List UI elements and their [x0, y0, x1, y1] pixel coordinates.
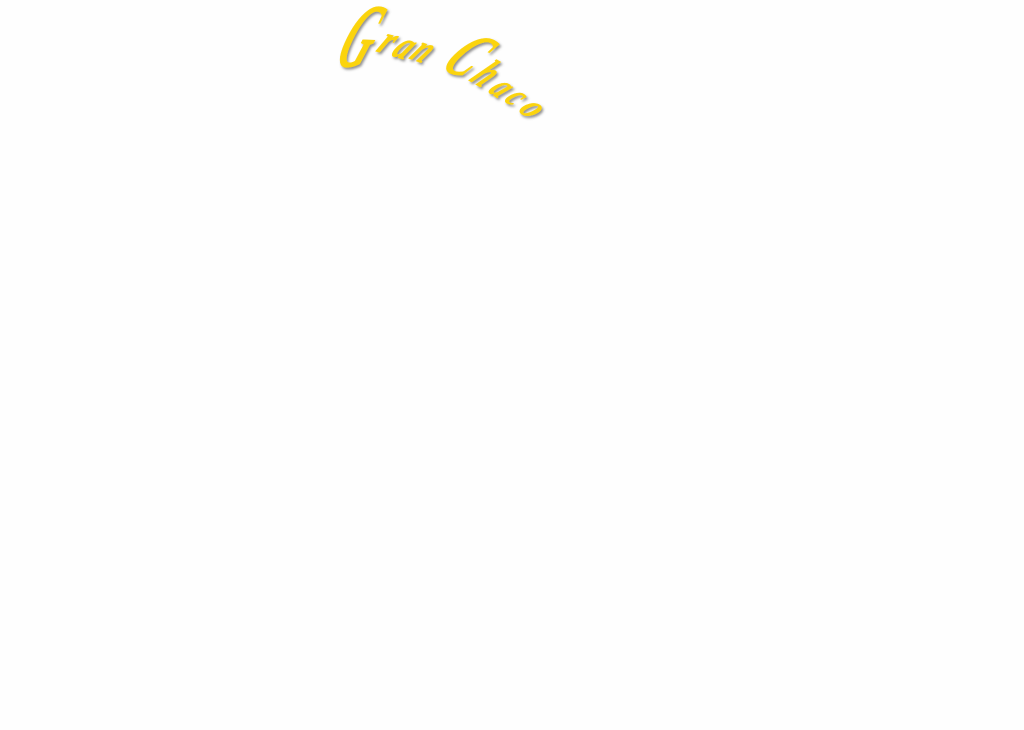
title: Gran Chaco curved script: o: [509, 91, 560, 124]
title: Gran Chaco curved script: C: [426, 21, 513, 91]
title: Gran Chaco curved script: r: [369, 19, 409, 63]
title: Gran Chaco curved script: a: [384, 25, 428, 68]
title: Gran Chaco curved script: [324, 0, 560, 124]
title: Gran Chaco curved script: a: [479, 70, 527, 104]
title: Gran Chaco curved script: h: [460, 52, 515, 95]
title: Gran Chaco curved script: c: [495, 82, 540, 112]
title: Gran Chaco curved script: n: [401, 29, 447, 72]
